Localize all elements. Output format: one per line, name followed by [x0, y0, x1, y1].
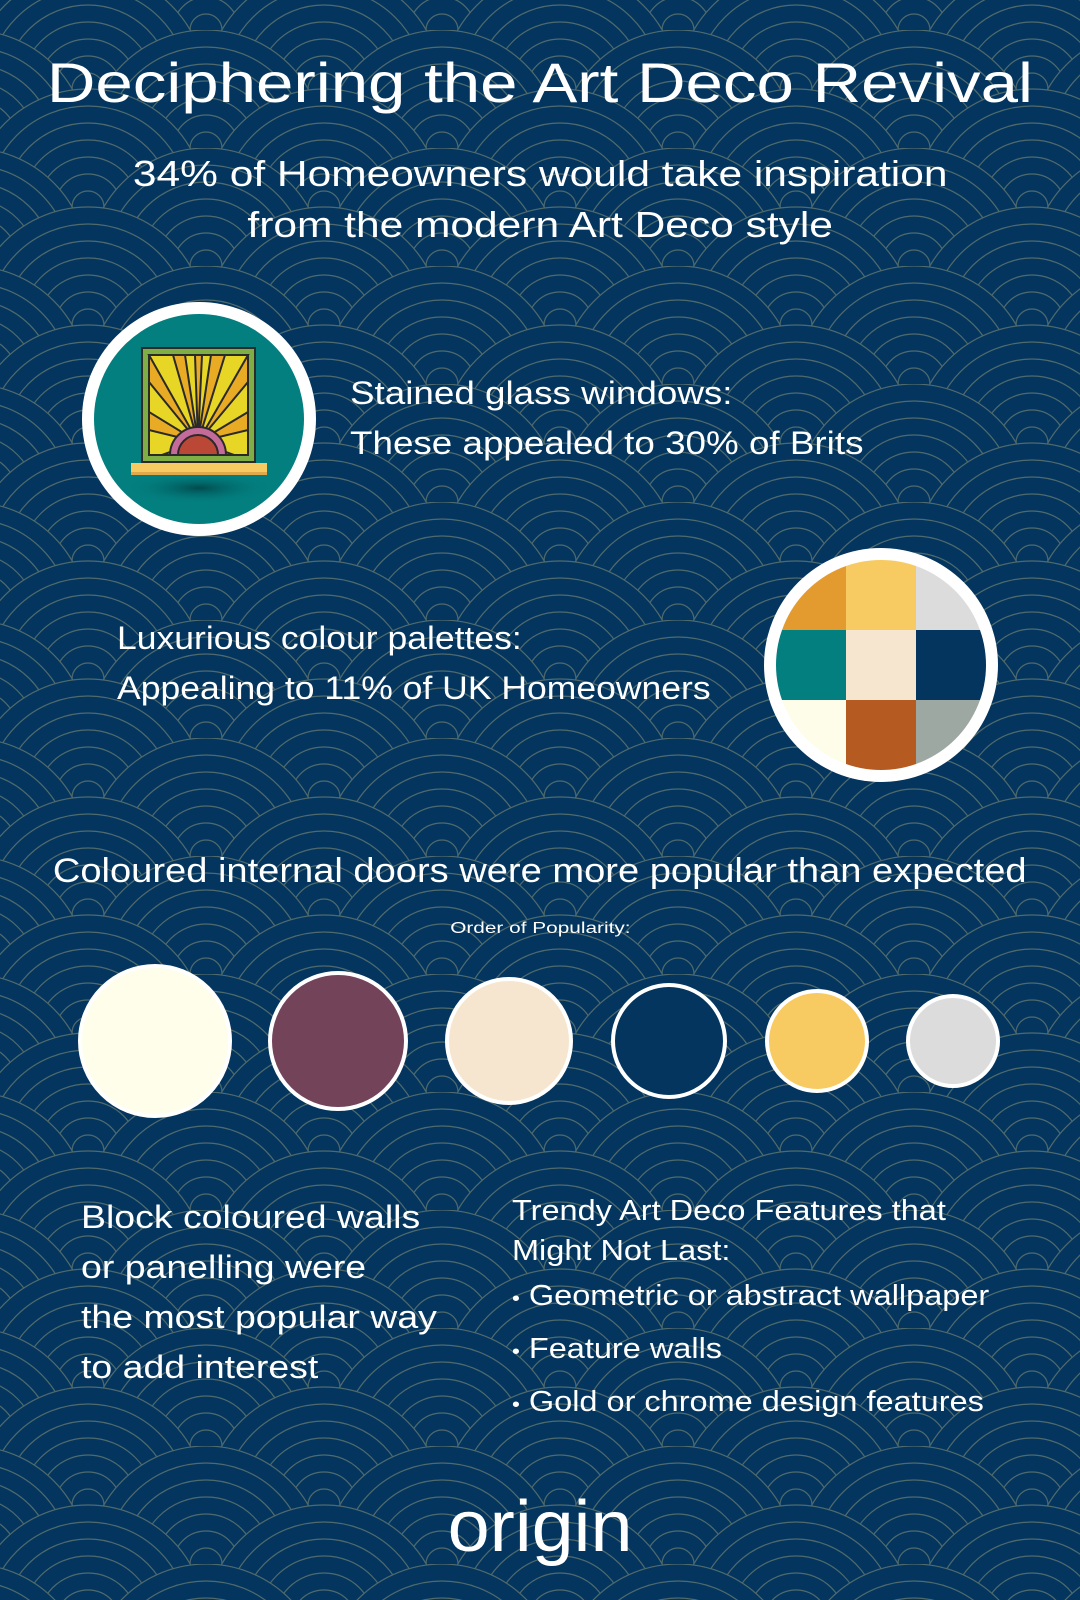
text: block coloured walls: or panelling were — [81, 1249, 366, 1285]
subtitle: from the modern Art Deco style — [247, 204, 833, 245]
text: block coloured walls: the most popular way — [81, 1299, 437, 1335]
circle: cream — [78, 964, 232, 1118]
text: stained glass — [350, 375, 863, 461]
text: block coloured walls: Block coloured walls — [81, 1199, 420, 1235]
logo: origin: origin — [448, 1487, 632, 1567]
circle: yellow — [765, 989, 869, 1093]
text: trendy features list: Might Not Last: — [512, 1235, 730, 1267]
text: trendy features list: Trendy Art Deco Features that — [512, 1195, 946, 1227]
circle: plum — [268, 971, 408, 1111]
door colour circles — [78, 964, 1000, 1118]
text: block coloured walls — [81, 1199, 437, 1385]
circle: grey — [906, 994, 1000, 1088]
circle: navy — [611, 983, 727, 1099]
text: stained glass: Stained glass windows: — [350, 375, 733, 411]
title: Deciphering the Art Deco Revival — [47, 51, 1033, 114]
text: trendy features list: • Gold or chrome design features — [512, 1386, 984, 1418]
text: colour palettes: Appealing to 11% of UK Homeowners — [117, 670, 711, 706]
label: order: Order of Popularity: — [450, 920, 630, 937]
icon: colour palette grid — [764, 548, 998, 782]
text: trendy features list: • Feature walls — [512, 1333, 722, 1365]
text: trendy features list — [512, 1195, 989, 1418]
subtitle: 34% of Homeowners would take inspiration — [133, 153, 947, 194]
heading: doors: Coloured internal doors were more popular than expected — [53, 852, 1027, 890]
text: stained glass: These appealed to 30% of Brits — [350, 425, 863, 461]
icon: stained glass window — [82, 302, 316, 536]
text: trendy features list: • Geometric or abstract wallpaper — [512, 1280, 989, 1312]
text: block coloured walls: to add interest — [81, 1349, 318, 1385]
text: colour palettes: Luxurious colour palettes: — [117, 620, 522, 656]
circle: beige — [445, 977, 573, 1105]
text: colour palettes — [117, 620, 711, 706]
subtitle — [133, 153, 947, 245]
